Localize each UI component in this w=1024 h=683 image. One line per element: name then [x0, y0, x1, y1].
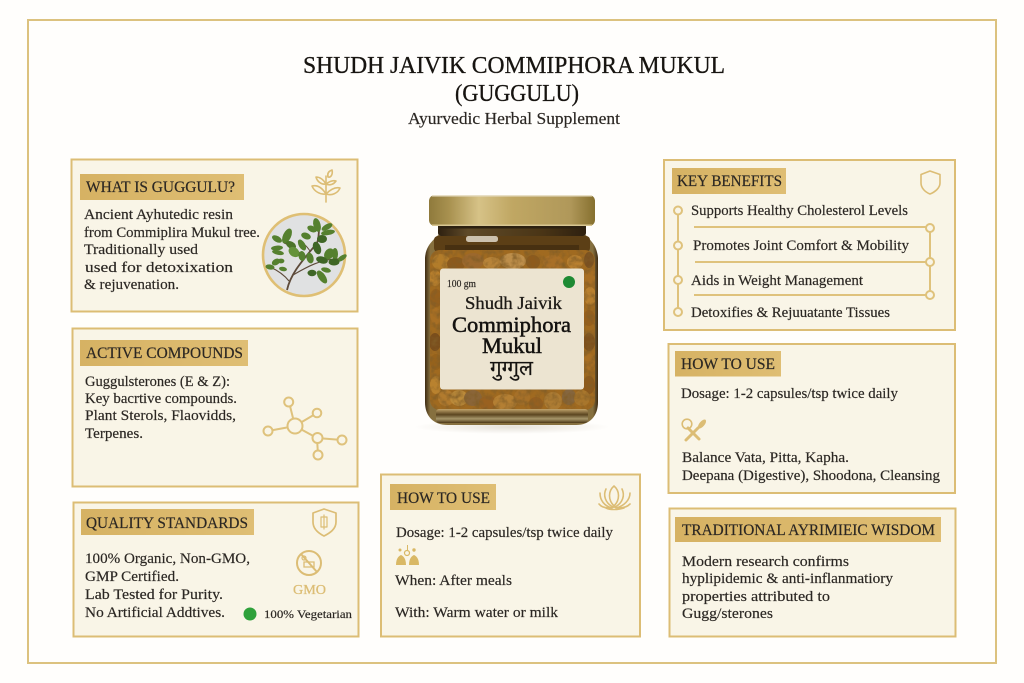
heading: what is guggulu: WHAT IS GUGGULU?	[86, 179, 235, 196]
heading: key benefits	[672, 168, 786, 194]
weight text: 100 gm	[447, 279, 476, 290]
heading: active compounds	[80, 340, 248, 366]
text: active compounds description	[85, 374, 237, 442]
text: with: With: Warm water or milk	[395, 605, 559, 621]
heading: what is guggulu	[80, 174, 244, 200]
label product name: Commiphora	[452, 312, 571, 337]
text: wisdom description: Gugg/sterones	[682, 606, 773, 622]
label product name: Mukul	[482, 333, 542, 358]
text: benefits list: Supports Healthy Cholesterol Levels	[691, 203, 908, 219]
vegetarian mark	[563, 276, 575, 288]
text: wisdom description: properties attributed to	[682, 589, 830, 605]
heading: how to use	[390, 484, 496, 510]
icon: vegetarian dot	[244, 608, 256, 620]
text: benefits list: Aids in Weight Management	[691, 273, 864, 289]
heading: traditional wisdom	[675, 517, 941, 542]
heading: active compounds: ACTIVE COMPOUNDS	[86, 345, 243, 362]
panel: traditional wisdom	[670, 508, 956, 636]
icon: no GMO badge	[293, 551, 326, 598]
connector timeline	[674, 206, 934, 316]
heading: quality standards: QUALITY STANDARDS	[86, 515, 248, 532]
jar lid	[429, 195, 595, 226]
text: benefits list: Promotes Joint Comfort & Mobility	[693, 238, 909, 254]
title: (GUGGULU)	[455, 81, 579, 107]
text: benefits list	[691, 203, 909, 321]
panel: active compounds	[72, 328, 358, 486]
label product name	[452, 293, 571, 358]
jar neck	[434, 226, 590, 252]
panel: quality standards	[74, 502, 358, 636]
text: active compounds description: Key bacrtive compounds.	[85, 391, 237, 407]
text: what is guggulu description: Ancient Ayhutedic resin	[84, 207, 234, 223]
heading: key benefits: KEY BENEFITS	[677, 173, 782, 190]
panel: how to use right	[668, 344, 955, 493]
text: active compounds description: Terpenes.	[85, 426, 143, 442]
label product name: Shudh Jaivik	[465, 293, 562, 313]
jar glass	[425, 232, 598, 425]
icon: guggul tree photo	[263, 214, 348, 296]
text: active compounds description: Plant Sterols, Flaovidds,	[85, 408, 236, 424]
icon: no GMO badge: GMO	[293, 583, 326, 598]
text: dosage: Dosage: 1-2 capsules/tsp twice daily	[396, 525, 613, 541]
text: dosage: Dosage: 1-2 capsules/tsp twice daily	[681, 386, 898, 402]
text: quality standards description: 100% Organic, Non-GMO,	[85, 551, 250, 567]
text: dosha balance: Balance Vata, Pitta, Kapha.	[682, 450, 849, 466]
text: benefits list: Detoxifies & Rejuuatante Tissues	[691, 305, 890, 321]
label: 100% vegetarian: 100% Vegetarian	[264, 607, 352, 621]
text: active compounds description: Guggulsterones (E & Z):	[85, 374, 230, 390]
text: what is guggulu description: & rejuvenation.	[84, 277, 179, 293]
icon: shield	[921, 171, 940, 194]
title	[303, 53, 725, 107]
text: what is guggulu description	[84, 207, 260, 293]
heading: how to use	[675, 351, 781, 376]
icon: spoon and herb	[682, 418, 708, 440]
text: quality standards description	[85, 551, 250, 621]
resin contents	[429, 250, 596, 411]
jar label	[440, 268, 584, 390]
text: what is guggulu description: used for detoxixation	[85, 260, 234, 276]
label hindi name: गुग्गुल	[490, 356, 534, 381]
text: dosha balance	[682, 450, 940, 484]
icon: molecule	[264, 398, 346, 460]
heading: how to use: HOW TO USE	[397, 490, 490, 507]
heading: how to use: HOW TO USE	[681, 356, 775, 373]
icon: shield	[313, 509, 336, 536]
text: quality standards description: No Artificial Addtives.	[85, 605, 225, 621]
jar bottom	[436, 409, 588, 423]
text: quality standards description: Lab Tested for Purity.	[85, 587, 223, 603]
panel: what is guggulu	[72, 160, 358, 312]
icon: herbal bottles	[396, 545, 419, 565]
icon: herb sprig	[312, 170, 340, 202]
text: what is guggulu description: from Commiplira Mukul tree.	[84, 225, 260, 241]
text: dosha balance: Deepana (Digestive), Shoodona, Cleansing	[682, 468, 940, 484]
heading: quality standards	[81, 509, 254, 535]
text: wisdom description: hyplipidemic & anti-inflanmatiory	[682, 571, 894, 587]
text: when: When: After meals	[395, 573, 512, 589]
heading: traditional wisdom: TRADITIONAL AYRIMIEIC WISDOM	[682, 522, 935, 539]
text: what is guggulu description: Traditionally used	[84, 242, 199, 258]
text: quality standards description: GMP Certified.	[85, 569, 179, 585]
subtitle: Ayurvedic Herbal Supplement	[408, 109, 620, 128]
text: wisdom description	[682, 554, 894, 622]
product jar	[425, 195, 598, 432]
panel: how to use center	[381, 474, 640, 636]
panel: key benefits	[664, 160, 955, 330]
title: SHUDH JAIVIK COMMIPHORA MUKUL	[303, 53, 725, 79]
text: wisdom description: Modern research confirms	[682, 554, 849, 570]
icon: lotus	[599, 486, 630, 510]
